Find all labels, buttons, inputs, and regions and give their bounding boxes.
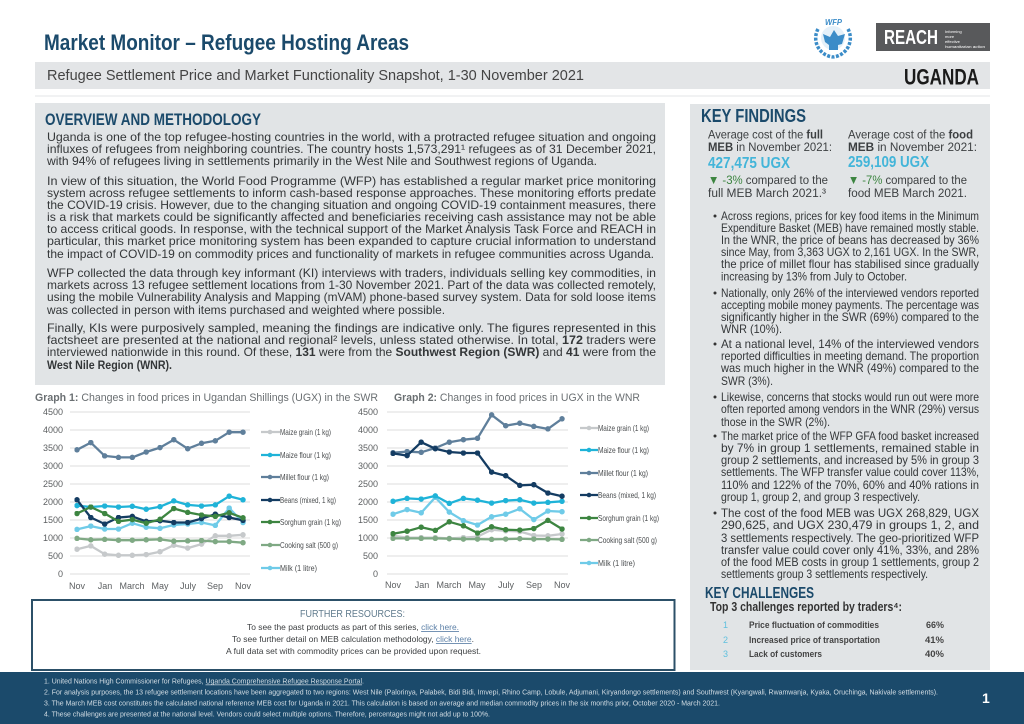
- bullet: stable prices: [714, 209, 979, 284]
- bullet: food basket: group 1, group 2, and group 3 respectively.: [721, 490, 920, 504]
- bullet: mobile money: WNR (10%).: [721, 322, 782, 336]
- chart: graph 1 SWR: 3000: [43, 461, 63, 471]
- text block: paragraph 2: In view of this situation, the World Food Programme (WFP) has established a regular market price monitoring: [47, 174, 656, 188]
- stat: full MEB: 427,475 UGX: [708, 155, 791, 172]
- chart: graph 1 SWR: 500: [48, 551, 63, 561]
- table: top challenges: Increased price of transportation: [749, 635, 880, 645]
- chart: graph 2 WNR: 3500: [358, 443, 378, 453]
- legend: graph 2: Maize flour (1 kg): [598, 446, 649, 455]
- chart: graph 2 WNR: 1500: [358, 515, 378, 525]
- bullet: stock concerns: those in the SWR (2%).: [721, 415, 830, 429]
- legend: graph 1: Maize grain (1 kg): [280, 428, 331, 437]
- text block: paragraph 2: particular, this market price monitoring system has been expanded to capture crucial information to understand: [47, 234, 656, 248]
- panel: further resources: A full data set with commodity prices can be provided upon request.: [226, 646, 481, 656]
- chart: graph 2 WNR: Jan: [415, 580, 429, 590]
- chart: graph 1 SWR: 4500: [43, 407, 63, 417]
- legend: graph 2: Milk (1 litre): [598, 559, 635, 568]
- chart: graph 1 SWR: Jan: [98, 581, 112, 591]
- graph 1 title: Graph 1: Changes in food prices in Ugandan Shillings (UGX) in the SWR: [35, 392, 378, 404]
- panel: further resources: FURTHER RESOURCES:: [300, 609, 405, 620]
- table: top challenges: Price fluctuation of commodities: [749, 620, 879, 630]
- bullet: food basket: [714, 429, 979, 504]
- bullet: food MEB cost: 290,625, and UGX 230,479 in groups 1, 2, and: [721, 518, 979, 532]
- legend: graph 2: Beans (mixed, 1 kg): [598, 491, 656, 500]
- stat: food MEB: food MEB March 2021.: [848, 186, 967, 200]
- bullet: meeting demand: reported difficulties in meeting demand. The proportion: [721, 349, 979, 363]
- text block: paragraph 3: markets across 13 refugee settlement locations from 1-30 November 2021. Part of the data was collected remotely,: [47, 278, 656, 292]
- text block: paragraph 4: [47, 321, 656, 372]
- text block: paragraph 1: influxes of refugees from neighboring countries. The country hosts 1,573,291¹ refugees as of 31 December 2021,: [47, 142, 656, 156]
- table: top challenges: [723, 620, 944, 659]
- chart: graph 1 SWR: 0: [58, 569, 63, 579]
- text block: paragraph 3: [46, 266, 656, 317]
- chart: graph 1 SWR: [35, 392, 378, 591]
- table: top challenges: 40%: [925, 649, 944, 659]
- chart: graph 1 SWR: 1000: [43, 533, 63, 543]
- chart: graph 2 WNR: Nov: [385, 580, 401, 590]
- bullet: stock concerns: Likewise, concerns that stocks would run out were more: [721, 390, 979, 404]
- chart: graph 2 WNR: 1000: [358, 533, 378, 543]
- subheading: top 3 challenges: Top 3 challenges reported by traders⁴:: [710, 600, 902, 614]
- chart: graph 1 SWR: 1500: [43, 515, 63, 525]
- footer band: [0, 672, 1024, 724]
- heading: key findings: KEY FINDINGS: [701, 105, 806, 126]
- stat: food MEB: 259,109 UGX: [848, 154, 930, 171]
- chart: graph 1 SWR: Sep: [207, 581, 223, 591]
- stat: full MEB: full MEB March 2021.³: [708, 186, 826, 200]
- bullet: food basket: by 7% in group 1 settlements, remained stable in: [721, 441, 979, 455]
- text block: paragraph 4: Finally, KIs were purposively sampled, meaning the findings are indicative only. The figures represented in this: [47, 321, 656, 335]
- chart: graph 2 WNR: July: [498, 580, 514, 590]
- bullet: food basket: settlements. The WFP transfer value could cover 113%,: [721, 465, 979, 479]
- text block: paragraph 2: the impact of COVID-19 on commodity prices and functionality of markets in refugee communities across Uganda.: [47, 247, 654, 261]
- stat: full MEB: ▼ -3% compared to the: [708, 173, 828, 187]
- bullet: mobile money: Nationally, only 26% of the interviewed vendors reported: [721, 286, 979, 300]
- bullet: food MEB cost: of the food MEB costs in group 1 settlements, group 2: [721, 555, 979, 569]
- chart: graph 2 WNR: May: [468, 580, 486, 590]
- footnotes: 1. United Nations High Commissioner for Refugees, Uganda Comprehensive Refugee Response Portal.: [44, 678, 364, 686]
- chart: graph 2 WNR: [358, 392, 659, 590]
- bullet: stock concerns: often reported among vendors in the WNR (29%) versus: [721, 402, 979, 416]
- bullet: stable prices: Expenditure Basket (MEB) have remained mostly stable.: [721, 221, 979, 235]
- legend: graph 1: Maize flour (1 kg): [280, 451, 331, 460]
- bullet: meeting demand: SWR (3%).: [721, 374, 773, 388]
- bullet: food basket: 110% and 122% of the 70%, 60% and 40% rations in: [721, 478, 979, 492]
- legend: graph 1: Beans (mixed, 1 kg): [280, 496, 336, 505]
- legend: graph 1: Cooking salt (500 g): [280, 541, 338, 550]
- text block: paragraph 1: [46, 130, 656, 168]
- legend: graph 2: [580, 424, 659, 568]
- chart: graph 2 WNR: 4500: [358, 407, 378, 417]
- bullet: food basket: group 2 settlements, and increased by 5% in group 3: [721, 453, 979, 467]
- panel: further resources: To see further detail on MEB calculation methodology, click here.: [232, 634, 474, 644]
- legend: graph 2: Cooking salt (500 g): [598, 536, 657, 545]
- panel: further resources: To see the past products as part of this series, click here.: [247, 622, 459, 632]
- chart: graph 1 SWR: 3500: [43, 443, 63, 453]
- page number: 1: [982, 690, 990, 706]
- legend: graph 2: Millet flour (1 kg): [598, 469, 648, 478]
- text block: paragraph 4: interviewed nationwide in this round. Of these, 131 were from the Southwest Region (SWR) and 41 were from the: [47, 345, 656, 359]
- bullet: stock concerns: [714, 390, 979, 429]
- logo: REACH: humanitarian action: [945, 44, 985, 49]
- text block: paragraph 4: West Nile Region (WNR).: [47, 358, 172, 372]
- graph 2 title: Graph 2: Changes in food prices in UGX in the WNR: [394, 392, 640, 404]
- table: top challenges: 2: [723, 635, 728, 645]
- heading: overview and methodology: OVERVIEW AND METHODOLOGY: [45, 110, 262, 129]
- chart: graph 1 SWR: Nov: [69, 581, 85, 591]
- bullet: food MEB cost: 3 settlements respectively. The geo-prioritized WFP: [721, 531, 979, 545]
- panel: further resources: [32, 600, 674, 670]
- bullet: mobile money: significantly higher in the SWR (69%) compared to the: [721, 310, 979, 324]
- legend: graph 2: Sorghum grain (1 kg): [598, 514, 659, 523]
- chart: graph 2 WNR: 500: [363, 551, 378, 561]
- subtitle bar: UGANDA: [904, 64, 979, 90]
- bullet: food MEB cost: transfer value could cover only 41%, 33%, and 28%: [721, 543, 979, 557]
- table: top challenges: 1: [723, 620, 728, 630]
- text block: paragraph 2: system across refugee settlements to inform cash-based response approaches. These monitoring efforts predate: [47, 186, 656, 200]
- bullet: stable prices: the price of millet flour has stabilised since gradually: [721, 257, 979, 271]
- text block: paragraph 1: with 94% of refugees living in settlements primarily in the West Nile and Southwest regions of Uganda.: [46, 154, 597, 168]
- bullet: meeting demand: [714, 337, 979, 388]
- chart: graph 1 SWR: May: [151, 581, 169, 591]
- legend: graph 1: Millet flour (1 kg): [280, 473, 329, 482]
- bullet: meeting demand: At a national level, 14% of the interviewed vendors: [721, 337, 979, 351]
- stat: full MEB: MEB in November 2021:: [708, 140, 832, 154]
- heading: key challenges: KEY CHALLENGES: [705, 585, 814, 602]
- text block: paragraph 2: [47, 174, 656, 261]
- table: top challenges: 66%: [926, 620, 944, 630]
- bullet: food basket: The market price of the WFP GFA food basket increased: [721, 429, 979, 443]
- chart: graph 1 SWR: 2500: [43, 479, 63, 489]
- bullet: stable prices: Across regions, prices for key food items in the Minimum: [721, 209, 979, 223]
- text block: paragraph 3: using the mobile Vulnerability Analysis and Mapping (mVAM) phone-based survey system. Data for sold loose items: [47, 290, 656, 304]
- chart: graph 1 SWR: Nov: [235, 581, 251, 591]
- bullet: food MEB cost: The cost of the food MEB was UGX 268,829, UGX: [721, 506, 979, 520]
- logo: REACH: [876, 23, 990, 51]
- text block: paragraph 4: factsheet are presented at the national and regional² levels, unless stated otherwise. In total, 172 traders were: [47, 333, 656, 347]
- chart: graph 2 WNR: 4000: [358, 425, 378, 435]
- stat: food MEB: MEB in November 2021:: [848, 140, 977, 154]
- table: top challenges: 41%: [925, 635, 944, 645]
- text block: paragraph 2: to access critical goods. In response, with the technical support of the Market Analysis Task Force and REACH in: [47, 222, 656, 236]
- stat: food MEB: Average cost of the food: [848, 128, 973, 142]
- chart: graph 2 WNR: March: [436, 580, 462, 590]
- bullet: meeting demand: was much higher in the WNR (49%) compared to the: [720, 361, 979, 375]
- legend: graph 1: [261, 428, 341, 573]
- text block: paragraph 3: WFP collected the data through key informant (KI) interviews with traders, individuals selling key commodities, in: [47, 266, 656, 280]
- bullet: mobile money: [714, 286, 979, 336]
- chart: graph 1 SWR: 2000: [43, 497, 63, 507]
- bullet: stable prices: In the WNR, the price of beans has decreased by 36%: [721, 233, 979, 247]
- chart: graph 1 SWR: July: [180, 581, 196, 591]
- chart: graph 2 WNR: 2500: [358, 479, 378, 489]
- chart: graph 2 WNR: Sep: [526, 580, 542, 590]
- bullet: food MEB cost: settlements group 3 settlements respectively.: [721, 567, 928, 581]
- chart: graph 1 SWR: 4000: [43, 425, 63, 435]
- icon: WFP logo: [816, 18, 850, 57]
- chart: graph 2 WNR: 2000: [358, 497, 378, 507]
- panel: key findings: [690, 104, 990, 670]
- logo: REACH: REACH: [884, 27, 938, 49]
- panel: overview and methodology: [35, 103, 665, 385]
- text block: paragraph 1: Uganda is one of the top refugee-hosting countries in the world, with a protracted refugee situation and ongoing: [47, 130, 656, 144]
- footnotes: 2. For analysis purposes, the 13 refugee settlement locations have been aggregated to two regions: West Nile (Palorinya, Palabek, Bidi Bidi, Imvepi, Rhino Camp, Lobule, Adjumani, Kiryandongo settlements) and Southwest (Kyangwali, Rwamwanja, Kyaka, Oruchinga, Nakivale settlements).: [44, 690, 938, 696]
- chart: graph 2 WNR: 3000: [358, 461, 378, 471]
- legend: graph 1: Milk (1 litre): [280, 564, 317, 573]
- chart: graph 1 SWR: March: [119, 581, 145, 591]
- text block: paragraph 3: was collected in person with items purchased and weighted where possible.: [46, 303, 445, 317]
- stat: food MEB: [848, 128, 977, 200]
- bullet: mobile money: accepting mobile money payments. The percentage was: [721, 298, 979, 312]
- stat: food MEB: ▼ -7% compared to the: [848, 173, 967, 187]
- text block: paragraph 2: the COVID-19 crisis. However, due to the changing situation and ongoing COVID-19 containment measures, there: [47, 198, 656, 212]
- footnotes: 3. The March MEB cost constitutes the calculated national reference MEB cost for Uganda in 2021. This calculation is based on average and median commodity prices in the six months prior, October 2020 - March 2021.: [44, 700, 720, 708]
- logo: REACH: effective: [945, 39, 961, 44]
- footnotes: 4. These challenges are presented at the national level. Vendors could select multiple options. Therefore, percentages might not add up to 100%.: [44, 712, 490, 718]
- bullet: stable prices: since May, from 3,363 UGX to 2,161 UGX. In the SWR,: [721, 245, 979, 259]
- legend: graph 1: Sorghum grain (1 kg): [280, 518, 341, 527]
- footnotes: [44, 678, 938, 718]
- bullet: stable prices: increasing by 13% from July to October.: [721, 270, 907, 284]
- chart: graph 2 WNR: 0: [373, 569, 378, 579]
- subtitle bar: [35, 62, 990, 90]
- title: Market Monitor – Refugee Hosting Areas: [44, 30, 409, 55]
- text block: paragraph 2: is a risk that markets could be significantly affected and beneficiaries receiving cash assistance may not be able: [47, 210, 656, 224]
- table: top challenges: Lack of customers: [749, 649, 822, 659]
- stat: full MEB: Average cost of the full: [708, 128, 823, 142]
- legend: graph 2: Maize grain (1 kg): [598, 424, 649, 433]
- bullet: food MEB cost: [714, 506, 979, 581]
- logo: REACH: more: [945, 34, 955, 39]
- logo: REACH: Informing: [945, 29, 962, 34]
- table: top challenges: 3: [723, 649, 728, 659]
- stat: full MEB: [708, 128, 832, 200]
- subtitle bar: Refugee Settlement Price and Market Functionality Snapshot, 1-30 November 2021: [47, 68, 584, 84]
- icon: WFP logo: WFP: [825, 18, 843, 27]
- chart: graph 2 WNR: Nov: [554, 580, 570, 590]
